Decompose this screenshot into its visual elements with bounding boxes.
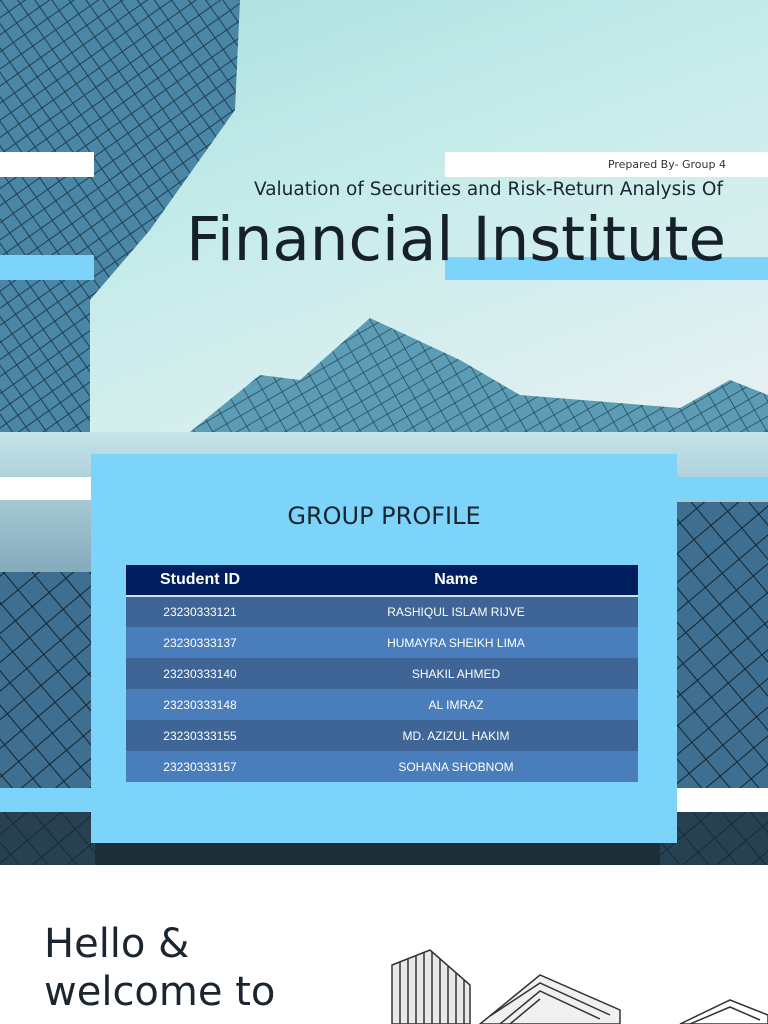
slide 1 decorative bars xyxy=(0,152,94,177)
table: members: SHAKIL AHMED xyxy=(412,666,500,680)
subtitle: Valuation of Securities and Risk-Return Analysis Of xyxy=(254,179,723,200)
panel: group profile xyxy=(91,454,677,843)
slide 2 decorative bars xyxy=(0,477,91,500)
prepared by label xyxy=(445,152,768,177)
table: members: 23230333148 xyxy=(163,698,237,712)
welcome heading: Hello & xyxy=(44,921,189,967)
table: members: Name xyxy=(434,571,478,588)
heading: group profile: GROUP PROFILE xyxy=(287,502,481,530)
table: members: 23230333157 xyxy=(163,760,237,774)
table: members: 23230333137 xyxy=(163,636,237,650)
prepared by label: Prepared By- Group 4 xyxy=(608,158,726,171)
title: Financial Institute xyxy=(186,204,726,275)
illustration: buildings line art xyxy=(391,949,768,1024)
welcome heading xyxy=(44,921,275,1015)
table: members: AL IMRAZ xyxy=(429,698,483,712)
table: members: HUMAYRA SHEIKH LIMA xyxy=(387,636,525,650)
slide 2 background xyxy=(0,432,768,865)
table: members: 23230333155 xyxy=(163,728,237,742)
table: members xyxy=(126,565,638,782)
table: members: SOHANA SHOBNOM xyxy=(398,760,514,774)
table: members: RASHIQUL ISLAM RIJVE xyxy=(387,605,525,619)
table: members: 23230333140 xyxy=(163,666,237,680)
table: members: 23230333121 xyxy=(163,605,237,619)
table: members: MD. AZIZUL HAKIM xyxy=(403,728,509,742)
welcome heading: welcome to xyxy=(44,969,275,1015)
table: members: Student ID xyxy=(160,571,240,588)
slide 1 background xyxy=(0,0,768,432)
